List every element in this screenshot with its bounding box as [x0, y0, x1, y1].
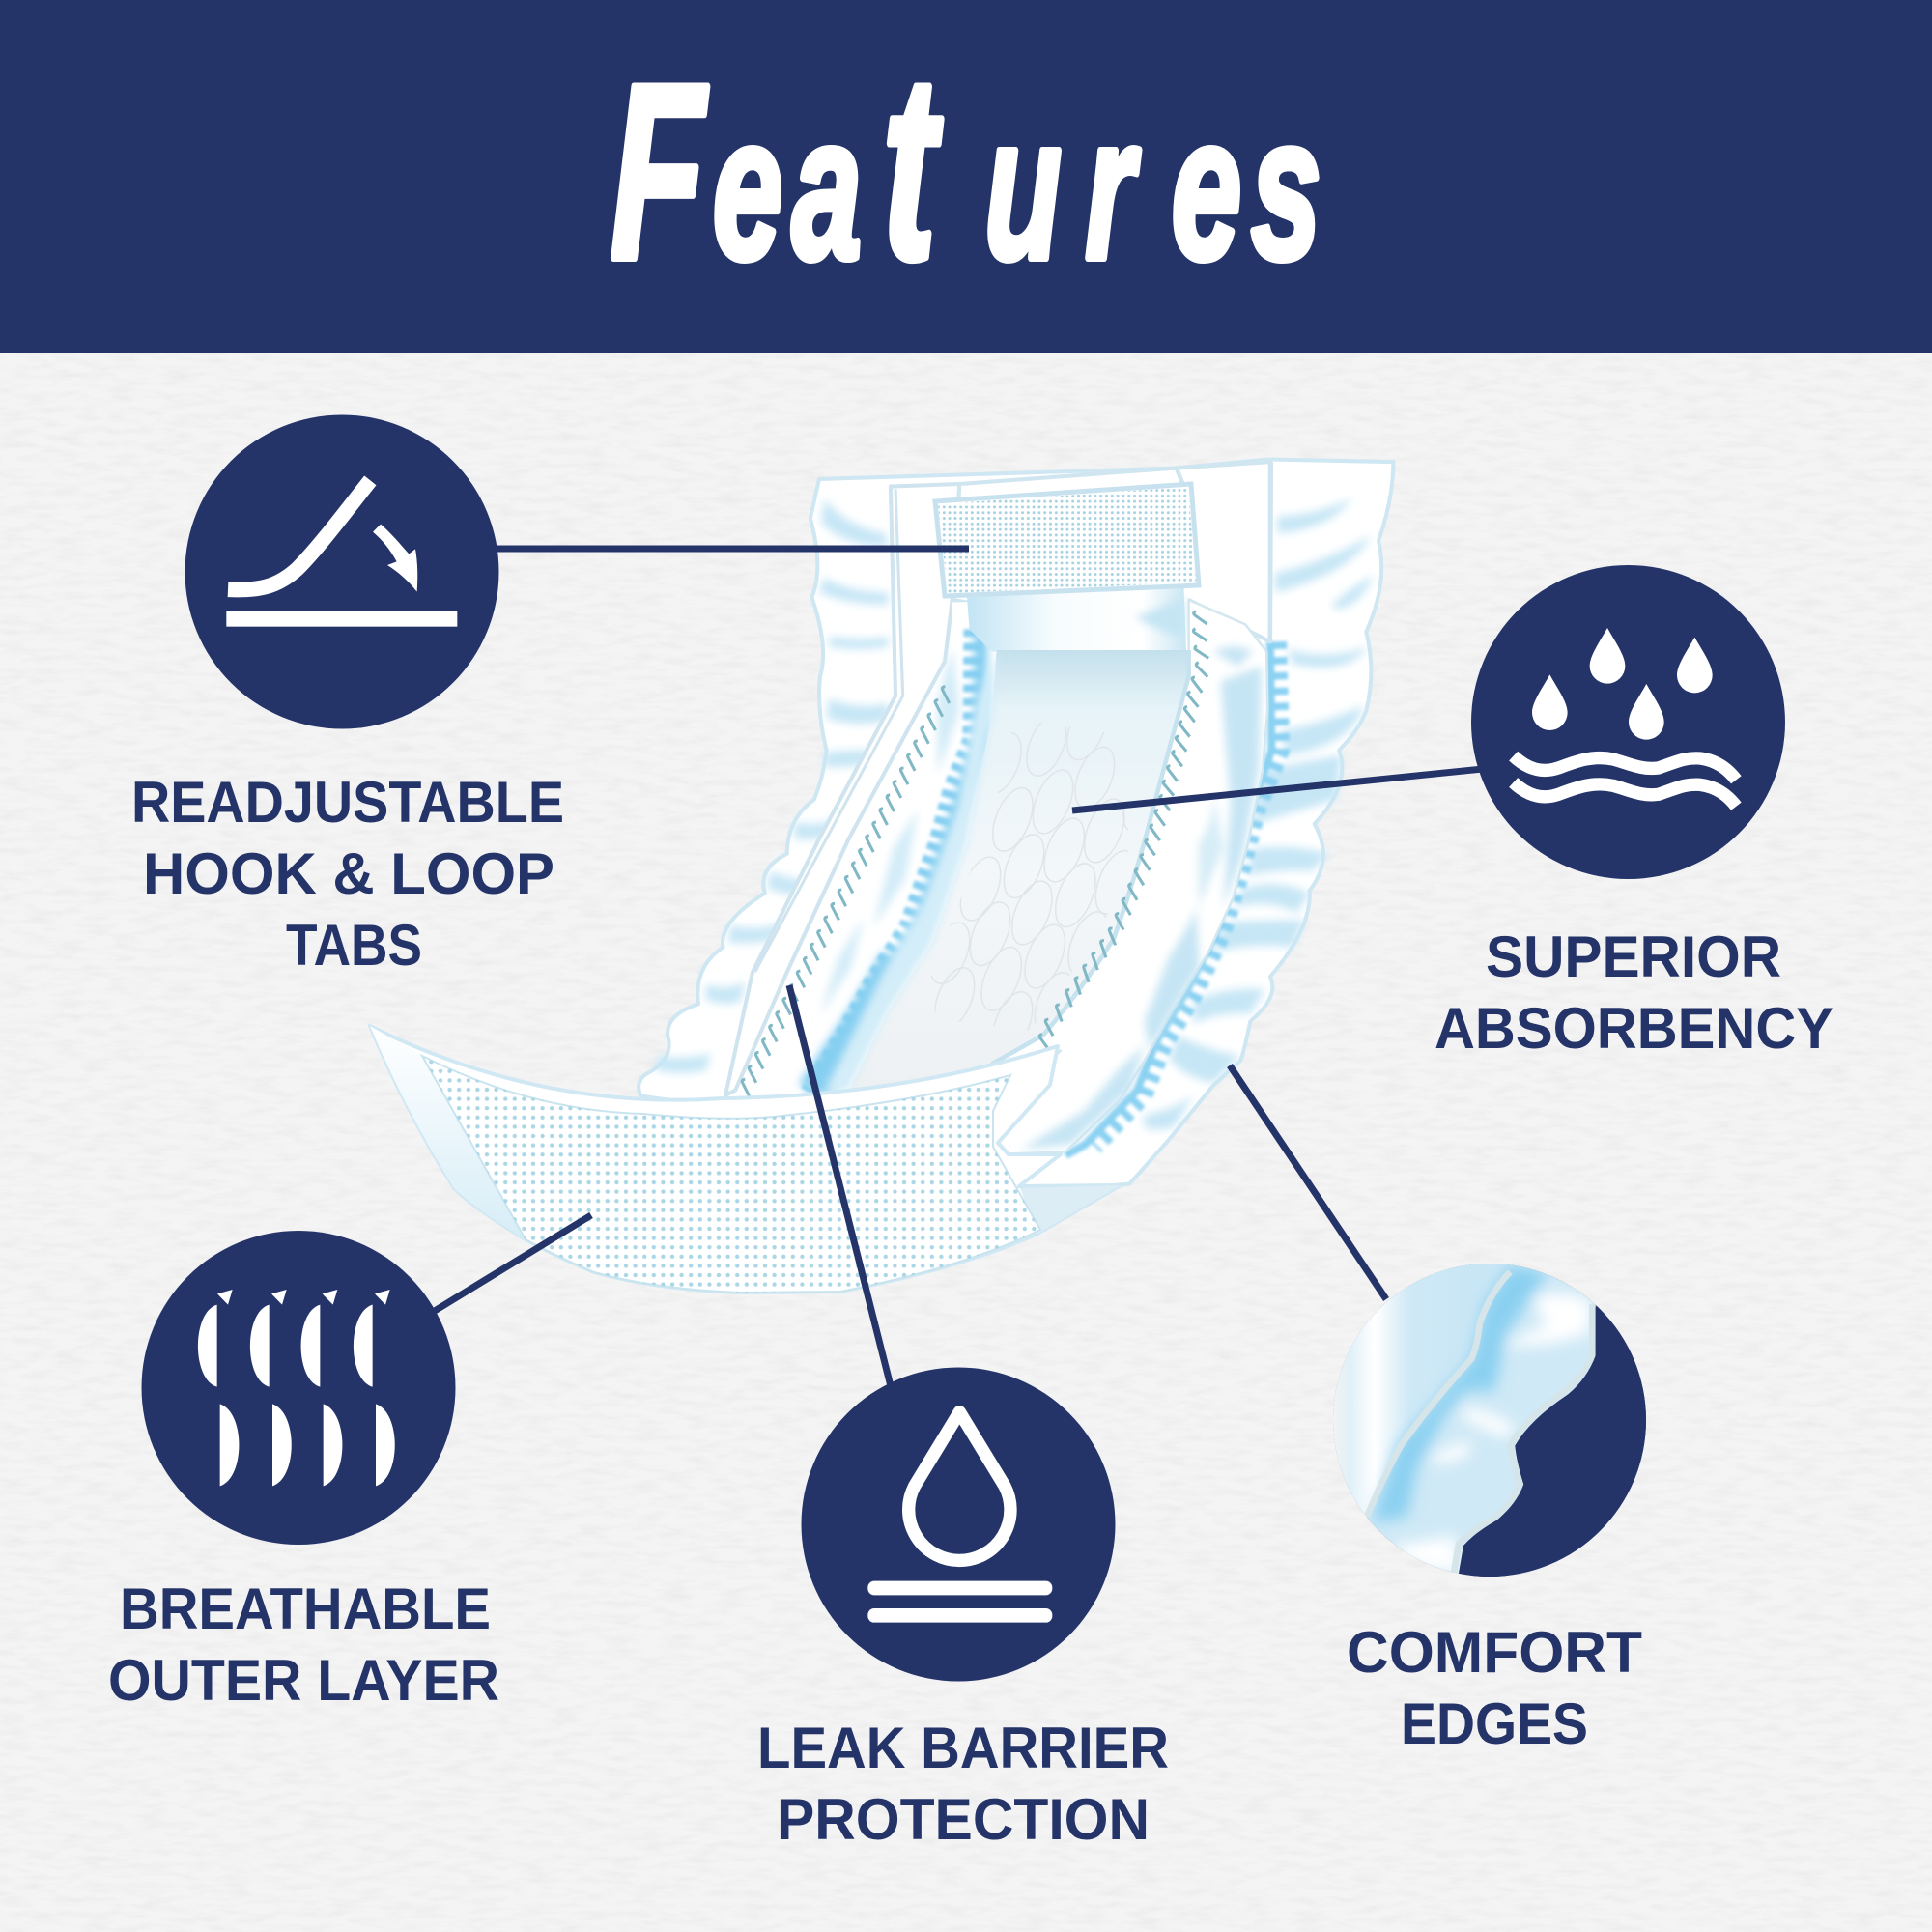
front waist panel — [370, 1026, 1121, 1293]
absorbent pad — [849, 650, 1189, 1091]
icon: hook and loop — [185, 415, 498, 728]
label: absorbency: SUPERIOR — [1486, 924, 1781, 989]
label: leak barrier: LEAK BARRIER — [757, 1716, 1169, 1780]
label: hook and loop: HOOK & LOOP — [143, 841, 554, 906]
pad top band — [967, 587, 1186, 651]
label: hook and loop: TABS — [286, 913, 422, 978]
label: breathable — [108, 1577, 499, 1713]
label: breathable: BREATHABLE — [120, 1577, 491, 1641]
leader lines — [430, 549, 1483, 1386]
label: comfort edges: COMFORT — [1347, 1620, 1642, 1685]
title: ea — [713, 75, 862, 302]
icon: absorbency — [1471, 565, 1785, 879]
left fold shading — [819, 646, 959, 1016]
leak guard stitching — [745, 619, 1201, 1089]
label: comfort edges — [1347, 1620, 1642, 1756]
label: hook and loop — [131, 770, 564, 978]
label: absorbency — [1435, 924, 1833, 1061]
hook and loop tab — [935, 484, 1199, 596]
label: hook and loop: READJUSTABLE — [131, 770, 564, 835]
icon: leak barrier — [802, 1368, 1115, 1681]
label: leak barrier — [757, 1716, 1169, 1852]
title: F — [611, 34, 708, 311]
edges — [1367, 1272, 1510, 1517]
title: ures — [984, 75, 1321, 302]
icon: comfort edges close-up — [1333, 1264, 1646, 1577]
ruffle shading — [657, 498, 1374, 1129]
material — [1333, 1264, 1596, 1575]
right blue teeth — [1065, 641, 1282, 1155]
mesh dots — [422, 1056, 1040, 1293]
pad edge line — [992, 650, 1189, 1065]
left side panel — [725, 484, 959, 1095]
title banner — [0, 0, 1932, 353]
title: t — [882, 20, 943, 314]
label: absorbency: ABSORBENCY — [1435, 996, 1833, 1061]
diaper illustration — [370, 460, 1393, 1293]
left blue channel — [810, 630, 980, 1093]
top waist band — [952, 462, 1270, 641]
icon: breathable — [141, 1231, 456, 1545]
label: breathable: OUTER LAYER — [108, 1648, 499, 1713]
pad honeycomb pattern — [923, 694, 1171, 1059]
right pad wing — [992, 600, 1267, 1154]
label: comfort edges: EDGES — [1401, 1691, 1588, 1756]
inner well — [784, 597, 1194, 1093]
label: leak barrier: PROTECTION — [777, 1787, 1150, 1852]
diaper body — [639, 460, 1393, 1194]
